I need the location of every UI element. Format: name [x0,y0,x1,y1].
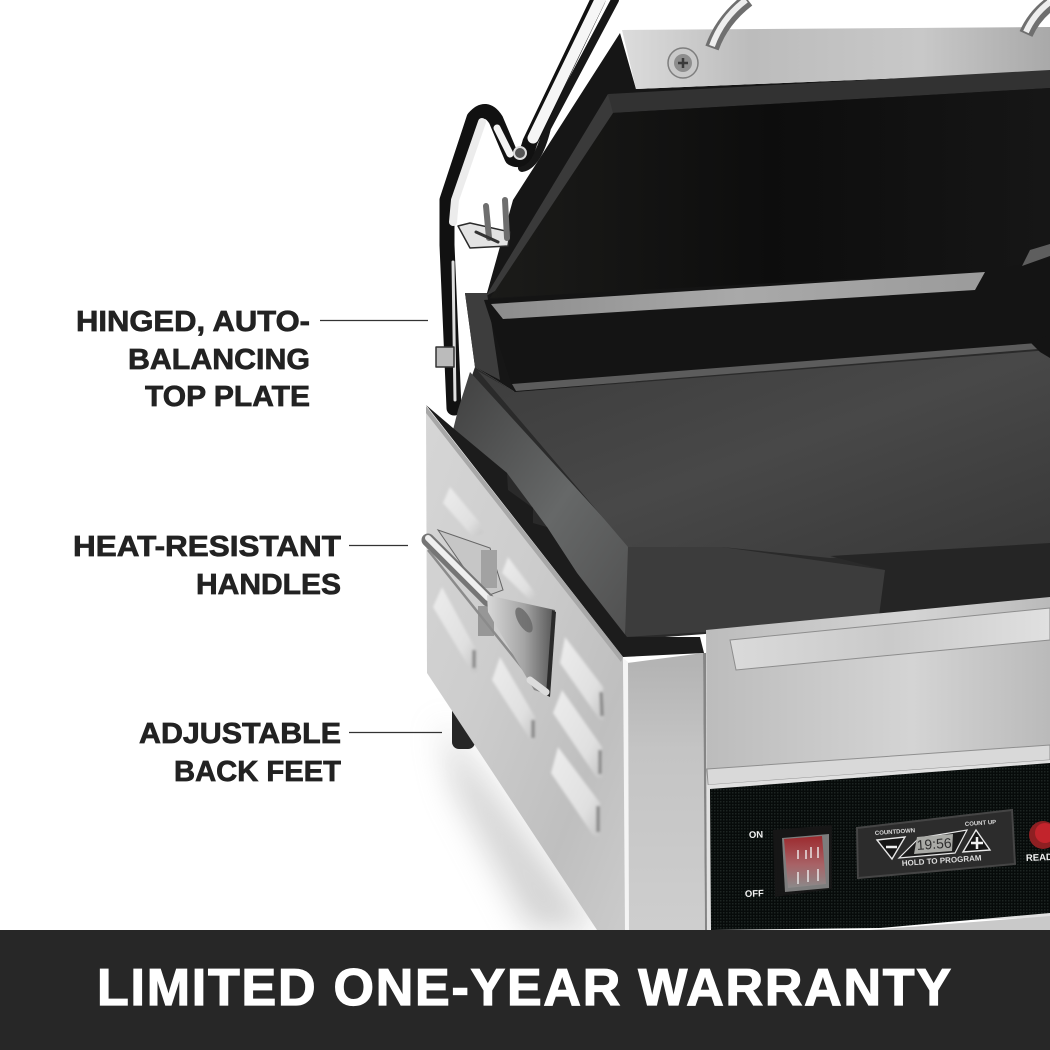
panel: stainless side wall [426,405,704,930]
panel: black control panel [710,763,1050,930]
icon: chrome hinge handle [436,0,615,408]
drop shadow under grill [440,720,597,930]
griddle side face [453,372,630,637]
callout: hinged auto-balancing top plate [76,306,428,413]
icon: plus button [963,830,990,852]
black top rim [426,405,704,657]
steel drip strip [491,272,985,319]
callout: heat-resistant handles [73,531,408,601]
callout: hinged auto-balancing top plate: BALANCING [128,344,310,376]
panel: lower griddle plate [453,335,1050,640]
banner heading: LIMITED ONE-YEAR WARRANTY [97,959,951,1017]
panel: front fascia [706,597,1050,930]
dark backing of the assembly [465,33,1050,392]
griddle front block [625,547,885,637]
top plate surface [490,88,1050,298]
louvre vents [433,487,604,838]
callout: heat-resistant handles: HANDLES [196,569,341,601]
far hinge hardware [1022,244,1050,266]
icon: adjustable back foot [452,705,475,749]
callout: hinged auto-balancing top plate: TOP PLATE [145,381,310,413]
upper housing steel [622,27,1050,89]
icon: mounting screw [668,48,698,78]
panel: open upper plate assembly [465,0,1050,394]
griddle surface [478,350,1050,558]
callout: hinged auto-balancing top plate: HINGED, AUTO- [76,306,310,338]
steel trim strip [707,745,1050,785]
chrome rods top [712,0,748,48]
warranty banner [0,930,1050,1050]
lcd display [899,830,967,858]
icon: minus button [877,837,905,859]
lcd display: 19:56 [916,835,952,853]
top plate left edge [486,94,613,296]
callout: adjustable back feet: ADJUSTABLE [139,718,341,750]
icon: heat-resistant chrome handle [428,530,556,697]
icon: red ready light [1029,821,1050,849]
label: hold to program: HOLD TO PROGRAM [902,853,982,868]
right griddle section [830,543,1050,616]
front lip [730,608,1050,670]
icon: power rocker switch [773,825,832,897]
label: countdown: COUNTDOWN [875,828,915,837]
label: off: OFF [745,888,764,900]
panel: stainless front column [623,653,707,930]
label: count up: COUNT UP [965,820,996,828]
grease ledge right [1030,335,1050,358]
timer control [857,810,1015,878]
callout: adjustable back feet [139,718,442,788]
surface raised rim [512,342,1050,391]
inner back wall [484,258,1050,394]
callout: heat-resistant handles: HEAT-RESISTANT [73,531,341,563]
label: on: ON [749,830,763,841]
top plate back lip [608,70,1050,113]
griddle backing [453,345,1050,640]
callout: adjustable back feet: BACK FEET [174,756,341,788]
